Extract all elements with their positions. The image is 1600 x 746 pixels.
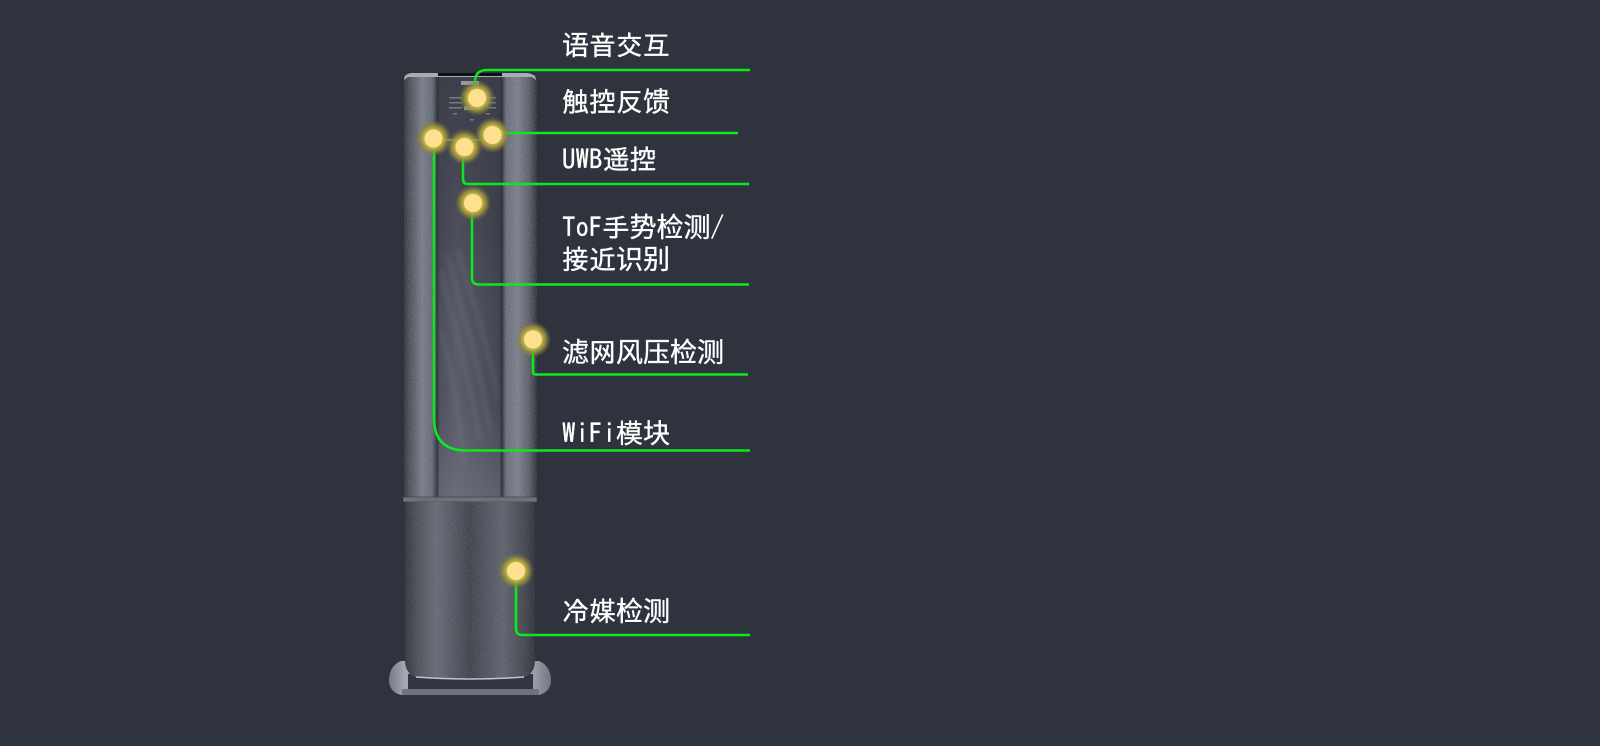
lower body (405, 502, 535, 679)
panel wave pattern (441, 250, 498, 470)
leader: UWB remote (463, 150, 749, 184)
dot: UWB (446, 129, 482, 165)
label: WiFi module: WiFi模块 (562, 419, 670, 447)
upper body (404, 73, 537, 498)
label: refrigerant detection: 冷媒检测 (562, 597, 670, 625)
leader: refrigerant detection (516, 575, 750, 635)
leader: ToF gesture (472, 208, 749, 284)
label: ToF gesture and proximity: 接近识别 (562, 246, 670, 273)
leader: filter pressure (533, 345, 748, 374)
divider band (403, 497, 537, 502)
dot: WiFi (416, 120, 452, 156)
label: filter air pressure: 滤网风压检测 (562, 338, 724, 366)
dot: touch feedback (474, 117, 510, 153)
dot: ToF (455, 185, 491, 221)
label: UWB remote: UWB遥控 (562, 146, 656, 173)
label: voice interaction: 语音交互 (562, 32, 670, 59)
display panel (449, 81, 496, 120)
base plate (389, 661, 551, 695)
dot: filter pressure (515, 322, 551, 358)
sensor dots (416, 80, 551, 589)
dot: voice interaction (459, 80, 495, 116)
label: touch feedback: 触控反馈 (562, 88, 670, 116)
top cap (404, 73, 536, 80)
leader: touch feedback (496, 132, 738, 134)
dot: refrigerant (498, 553, 534, 589)
label: ToF gesture and proximity (562, 213, 724, 273)
leader lines (434, 70, 750, 635)
leader: WiFi module (434, 142, 750, 450)
label: ToF gesture and proximity: ToF手势检测/ (562, 213, 724, 241)
air conditioner tower unit (389, 73, 551, 695)
leader: voice interaction (475, 70, 750, 90)
